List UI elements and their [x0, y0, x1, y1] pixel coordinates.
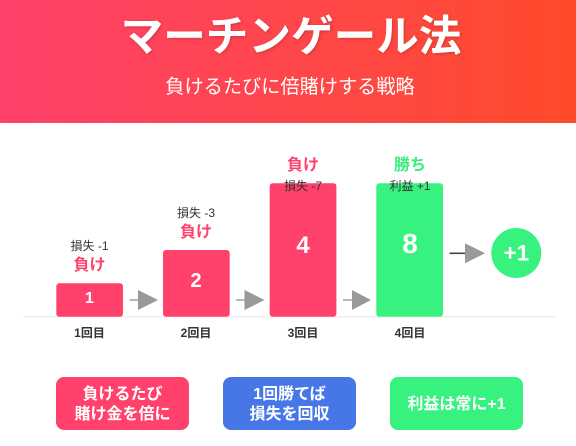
round 2: 損失 -3	[177, 205, 215, 220]
round 2	[163, 205, 230, 340]
callout: recover losses	[223, 377, 356, 430]
header banner	[0, 0, 576, 123]
round 4	[376, 156, 443, 340]
result badge: +1	[503, 240, 529, 266]
round 3: 3回目	[288, 326, 318, 340]
round 1: 1回目	[74, 326, 105, 340]
round 2: 2回目	[181, 326, 211, 340]
round 4: 利益 +1	[389, 179, 431, 193]
round 1	[56, 238, 123, 340]
callout: double the bet	[56, 377, 189, 430]
callout: double the bet: 負けるたび	[82, 386, 162, 402]
round 3	[270, 155, 336, 340]
callout: always plus one	[390, 377, 523, 430]
round 3: 負け	[287, 155, 319, 174]
arrow 3	[343, 290, 371, 310]
round 2: 2	[190, 270, 202, 292]
round 3: 4	[296, 232, 310, 259]
subtitle: 負けるたびに倍賭けする戦略	[165, 77, 415, 98]
callout: double the bet: 賭け金を倍に	[74, 406, 170, 422]
round 3: 損失 -7	[284, 178, 322, 193]
round 1: 損失 -1	[70, 238, 109, 253]
callout: recover losses: 1回勝てば	[253, 386, 326, 402]
round 4: 勝ち	[394, 156, 426, 174]
round 1: 負け	[73, 255, 106, 274]
result badge	[491, 228, 541, 278]
round 1: 1	[85, 290, 94, 307]
arrow 1	[130, 290, 158, 310]
round 4: 4回目	[395, 326, 425, 340]
round 2: 負け	[180, 222, 212, 241]
arrow to result	[450, 243, 485, 263]
round 4: 8	[402, 228, 418, 259]
callout: always plus one: 利益は常に+1	[407, 396, 506, 412]
arrow 2	[236, 290, 264, 310]
callout: recover losses: 損失を回収	[249, 406, 330, 422]
title: マーチンゲール法	[121, 13, 461, 61]
